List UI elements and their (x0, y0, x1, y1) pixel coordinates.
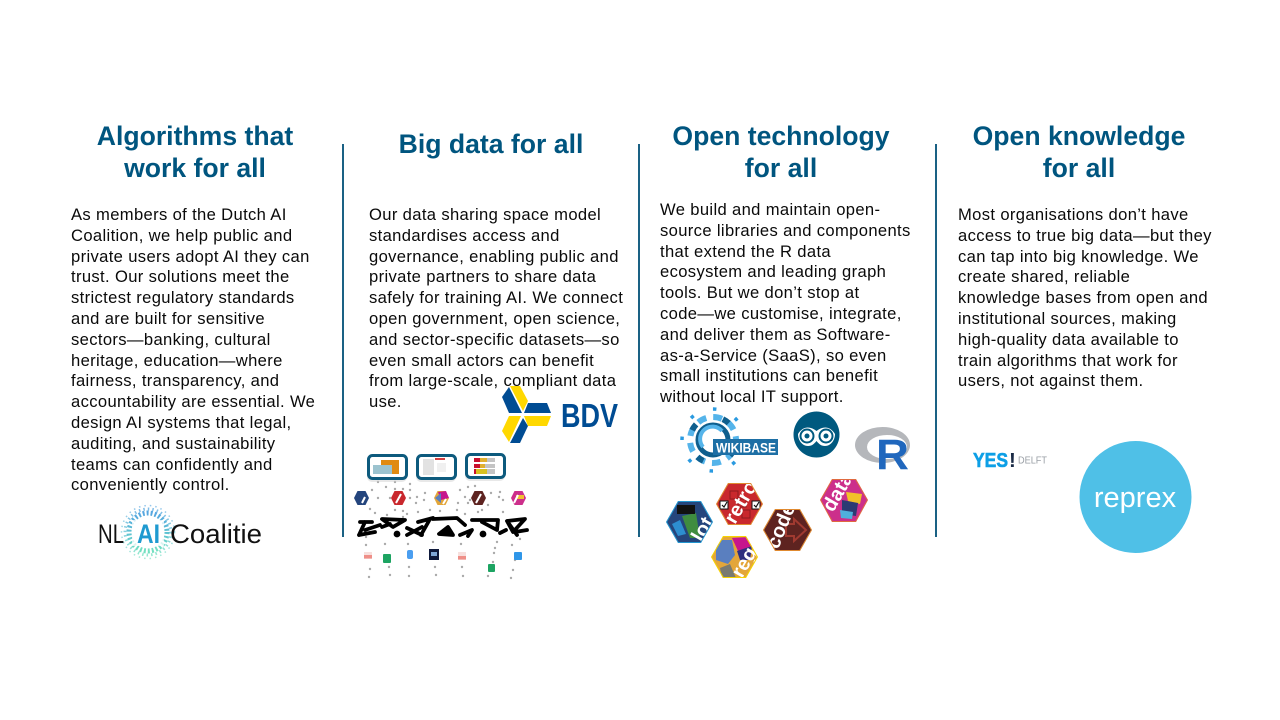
text block: algorithms: teams can confidently and (71, 455, 273, 474)
hex badge: data: data (818, 468, 858, 516)
hex badge: code: code (762, 500, 800, 552)
logo: BDV: BDV (561, 397, 618, 434)
text block: open knowledge: knowledge bases from open and (958, 288, 1208, 307)
heading: big data: Big data for all (399, 129, 583, 159)
screen 2 (416, 456, 456, 482)
text block: open technology: and deliver them as Software- (660, 325, 891, 344)
text block: open knowledge: access to true big data—but they (958, 226, 1212, 245)
text block: big data: safely for training AI. We connect (369, 288, 623, 307)
hex badge: reg (711, 536, 758, 578)
file icons (364, 549, 522, 572)
text block: open technology: as-a-Service (SaaS), so even (660, 346, 887, 365)
logo: NL AI Coalitie: Coalitie (170, 519, 262, 549)
logo: reprex: reprex (1094, 482, 1177, 514)
hex badge: lot: lot (687, 513, 719, 546)
text block: open technology: source libraries and components (660, 221, 911, 240)
text block: open knowledge: create shared, reliable (958, 267, 1130, 286)
logo: NL AI Coalitie: AI (137, 519, 160, 549)
logo: YES! Delft: ! (1009, 449, 1016, 472)
logo: YES! Delft: YES (973, 449, 1008, 472)
heading: open knowledge: Open knowledge (973, 121, 1185, 151)
text block: algorithms: strictest regulatory standards (71, 288, 295, 307)
text block: open knowledge: institutional sources, making (958, 309, 1177, 328)
logo: NL AI Coalitie (98, 506, 262, 558)
text block: big data: from large-scale, compliant data (369, 371, 616, 390)
text block: big data: and sector-specific datasets—so (369, 330, 620, 349)
text block: algorithms: private users adopt AI they can (71, 247, 310, 266)
text block: algorithms: auditing, and sustainability (71, 434, 275, 453)
logo: owl (794, 412, 840, 458)
logo: R (855, 427, 910, 479)
text block: big data: even small actors can benefit (369, 351, 594, 370)
hex badge: lot (666, 501, 713, 543)
text block: algorithms: Coalition, we help public and (71, 226, 292, 245)
logo: NL AI Coalitie: NL (98, 519, 124, 549)
logo: YES! Delft (973, 449, 1047, 472)
text block: algorithms: accountability are essential. We (71, 392, 315, 411)
text block: open technology: that extend the R data (660, 242, 831, 261)
logo: Wikibase (682, 409, 778, 471)
hex badge: data (820, 479, 868, 522)
heading: open knowledge: for all (1043, 153, 1115, 183)
text block: open knowledge: train algorithms that work for (958, 351, 1178, 370)
black network links (359, 518, 527, 536)
text block: open knowledge: high-quality data available to (958, 330, 1179, 349)
heading: algorithms (97, 121, 293, 183)
text block: algorithms: design AI systems that legal, (71, 413, 291, 432)
text block: open technology: small institutions can benefit (660, 366, 878, 385)
heading: open knowledge (973, 121, 1185, 183)
heading: open technology (672, 121, 890, 183)
heading: algorithms: Algorithms that (97, 121, 293, 151)
logo: reprex (1080, 441, 1192, 553)
text block: open technology: code—we customise, integrate, (660, 304, 902, 323)
hex badge: reg: reg (727, 544, 762, 582)
hex badge: retro: retro (720, 477, 762, 528)
text block: big data: private partners to share data (369, 267, 596, 286)
text block: open knowledge: users, not against them. (958, 371, 1144, 390)
text block: open knowledge: can tap into big knowledge. We (958, 247, 1199, 266)
text block: algorithms: fairness, transparency, and (71, 371, 279, 390)
screen 3 (465, 454, 505, 481)
text block: open technology: ecosystem and leading graph (660, 262, 886, 281)
logo: R: R (876, 431, 909, 479)
text block: algorithms: trust. Our solutions meet the (71, 267, 290, 286)
text block: algorithms: and are built for sensitive (71, 309, 265, 328)
heading: algorithms: work for all (124, 153, 266, 183)
logo: Wikibase: WIKIBASE (716, 440, 776, 456)
heading: open technology: for all (745, 153, 817, 183)
text block: open technology: tools. But we don’t stop at (660, 283, 859, 302)
text block: open technology: without local IT support. (660, 387, 844, 406)
text block: open technology (660, 200, 911, 406)
text block: open knowledge: Most organisations don’t have (958, 205, 1189, 224)
text block: algorithms: As members of the Dutch AI (71, 205, 287, 224)
text block: big data (369, 205, 623, 411)
hex badge: code (763, 509, 812, 551)
text block: big data: governance, enabling public and (369, 247, 619, 266)
text block: big data: Our data sharing space model (369, 205, 601, 224)
text block: open technology: We build and maintain open- (660, 200, 880, 219)
text block: big data: use. (369, 392, 402, 411)
text block: big data: standardises access and (369, 226, 560, 245)
heading: open technology: Open technology (672, 121, 890, 151)
screen 1 (367, 456, 407, 482)
text block: big data: open government, open science, (369, 309, 620, 328)
text block: algorithms: sectors—banking, cultural (71, 330, 271, 349)
row of hex badges (354, 491, 526, 505)
text block: algorithms: conveniently control. (71, 475, 230, 494)
connection dots (365, 481, 521, 579)
text block: algorithms: heritage, education—where (71, 351, 283, 370)
logo: BDV (502, 386, 618, 443)
logo: YES! Delft: DELFT (1018, 456, 1047, 466)
text block: open knowledge (958, 205, 1212, 390)
diagram: data sharing space (354, 454, 527, 579)
text block: algorithms (71, 205, 315, 494)
